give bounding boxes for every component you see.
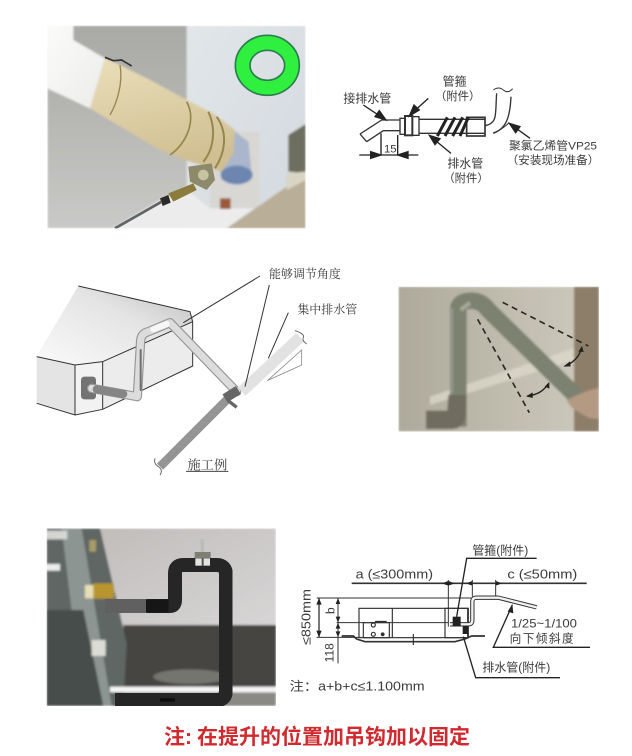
label: formula note: 注：a+b+c≤1.100mm [290,680,425,694]
diagram: drain pipe lift dimensions [290,543,590,694]
icon: green ring marker [235,35,299,95]
label: adjustable angle: 能够调节角度 [269,266,341,281]
diagram: installation example with indoor unit [37,266,357,475]
label: dimension c: c (≤50mm) [507,567,577,581]
drain outlet [81,377,96,399]
dimension arrows [316,581,513,637]
leader lines [453,558,590,678]
diagram: drain hose connection detail [343,73,599,185]
label: downward slope: 向下倾斜度 [510,632,574,646]
leader lines [183,276,288,387]
label: dimension 118: 118 [323,643,337,662]
insulated pipe [105,565,226,700]
label: clamp accessory: 管箍(附件) [472,543,528,558]
label: dimension a: a (≤300mm) [356,567,433,581]
slope triangle [267,350,302,381]
label: clamp accessory: 管箍 [443,73,467,88]
raised drain pipe [450,598,537,624]
unit outline [342,608,485,645]
curved double arrows [527,348,581,396]
label: prepared on site: （安装现场准备） [507,153,599,167]
label: dimension 15: 15 [384,143,397,155]
label: connecting drain pipe: 接排水管 [343,90,391,105]
caption: red fixing note: 注: [164,726,192,749]
label: max 850mm: ≤850mm [299,589,313,645]
ceiling and reference lines [317,580,587,663]
indoor unit box [37,286,193,415]
connector elbow and drain pipe [360,88,513,142]
label: PVC pipe VP25: 聚氯乙烯管VP25 [509,139,597,153]
hanger bracket [195,539,211,566]
hatched spiral wrap [437,117,468,136]
label: construction example: 施工例 [187,457,227,472]
leader arrows [359,98,530,158]
dashed angle guide lines [478,302,588,413]
adjustable drain pipe run [92,323,237,397]
label: drain pipe accessory: 排水管(附件) [482,659,550,674]
photo: grey pipe showing adjustable angle [398,287,599,432]
label: drain pipe: 排水管 [447,155,483,170]
main drain pipe [155,331,307,475]
label: central drain pipe: 集中排水管 [297,301,357,316]
label: slope ratio: 1/25~1/100 [511,618,578,631]
label: drain pipe accessory note: （附件） [443,171,489,185]
icon: pipe clamp [115,163,215,228]
caption: red fixing note: 在提升的位置加吊钩加以固定 [197,725,470,749]
photo: black insulated drain pipe with raised hanger [47,528,276,706]
label: dimension b: b [323,607,337,614]
label: accessory note: （附件） [435,89,480,103]
photo: wrapped pipe with clamp and green ring [47,26,306,228]
